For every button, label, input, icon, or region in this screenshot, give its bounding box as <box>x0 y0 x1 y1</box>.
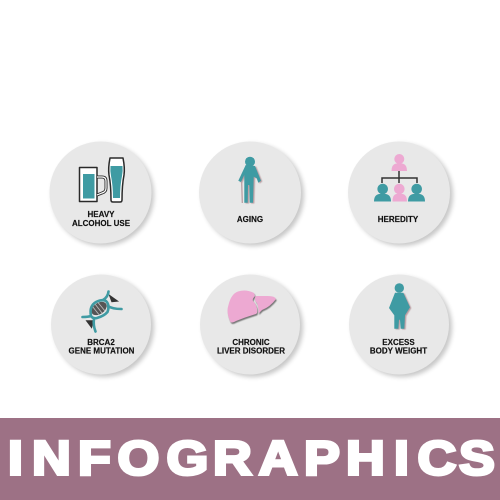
icon: elderly person with cane <box>238 157 262 204</box>
label: chronic liver disorder: CHRONIC <box>232 338 270 347</box>
label: excess body weight: BODY WEIGHT <box>370 346 427 356</box>
label: heavy alcohol use: HEAVY <box>88 210 115 219</box>
dna end wedges <box>87 296 117 327</box>
label: chronic liver disorder: LIVER DISORDER <box>217 346 285 356</box>
panel: excess body weight <box>349 274 452 377</box>
icon: beer mug and glass <box>80 158 124 202</box>
panel: chronic liver disorder <box>200 274 303 377</box>
label: brca2 gene mutation: GENE MUTATION <box>69 346 135 356</box>
icon: family tree <box>374 154 425 202</box>
icon: overweight person <box>389 283 411 330</box>
label: brca2 gene mutation: BRCA2 <box>87 338 115 347</box>
dna centre rungs <box>89 299 109 318</box>
label: excess body weight: EXCESS <box>382 338 415 347</box>
panel: brca2 gene mutation <box>51 274 154 377</box>
panel: heavy alcohol use <box>50 142 154 246</box>
panel: aging <box>199 142 304 246</box>
label: aging: AGING <box>237 215 263 224</box>
icon: dna helix <box>82 292 122 332</box>
banner title: INFOGRAPHICS <box>8 431 495 485</box>
icon: liver <box>228 291 277 324</box>
label: heredity: HEREDITY <box>378 215 419 224</box>
panel: heredity <box>348 142 453 246</box>
banner <box>0 418 500 500</box>
label: heavy alcohol use: ALCOHOL USE <box>72 219 131 228</box>
